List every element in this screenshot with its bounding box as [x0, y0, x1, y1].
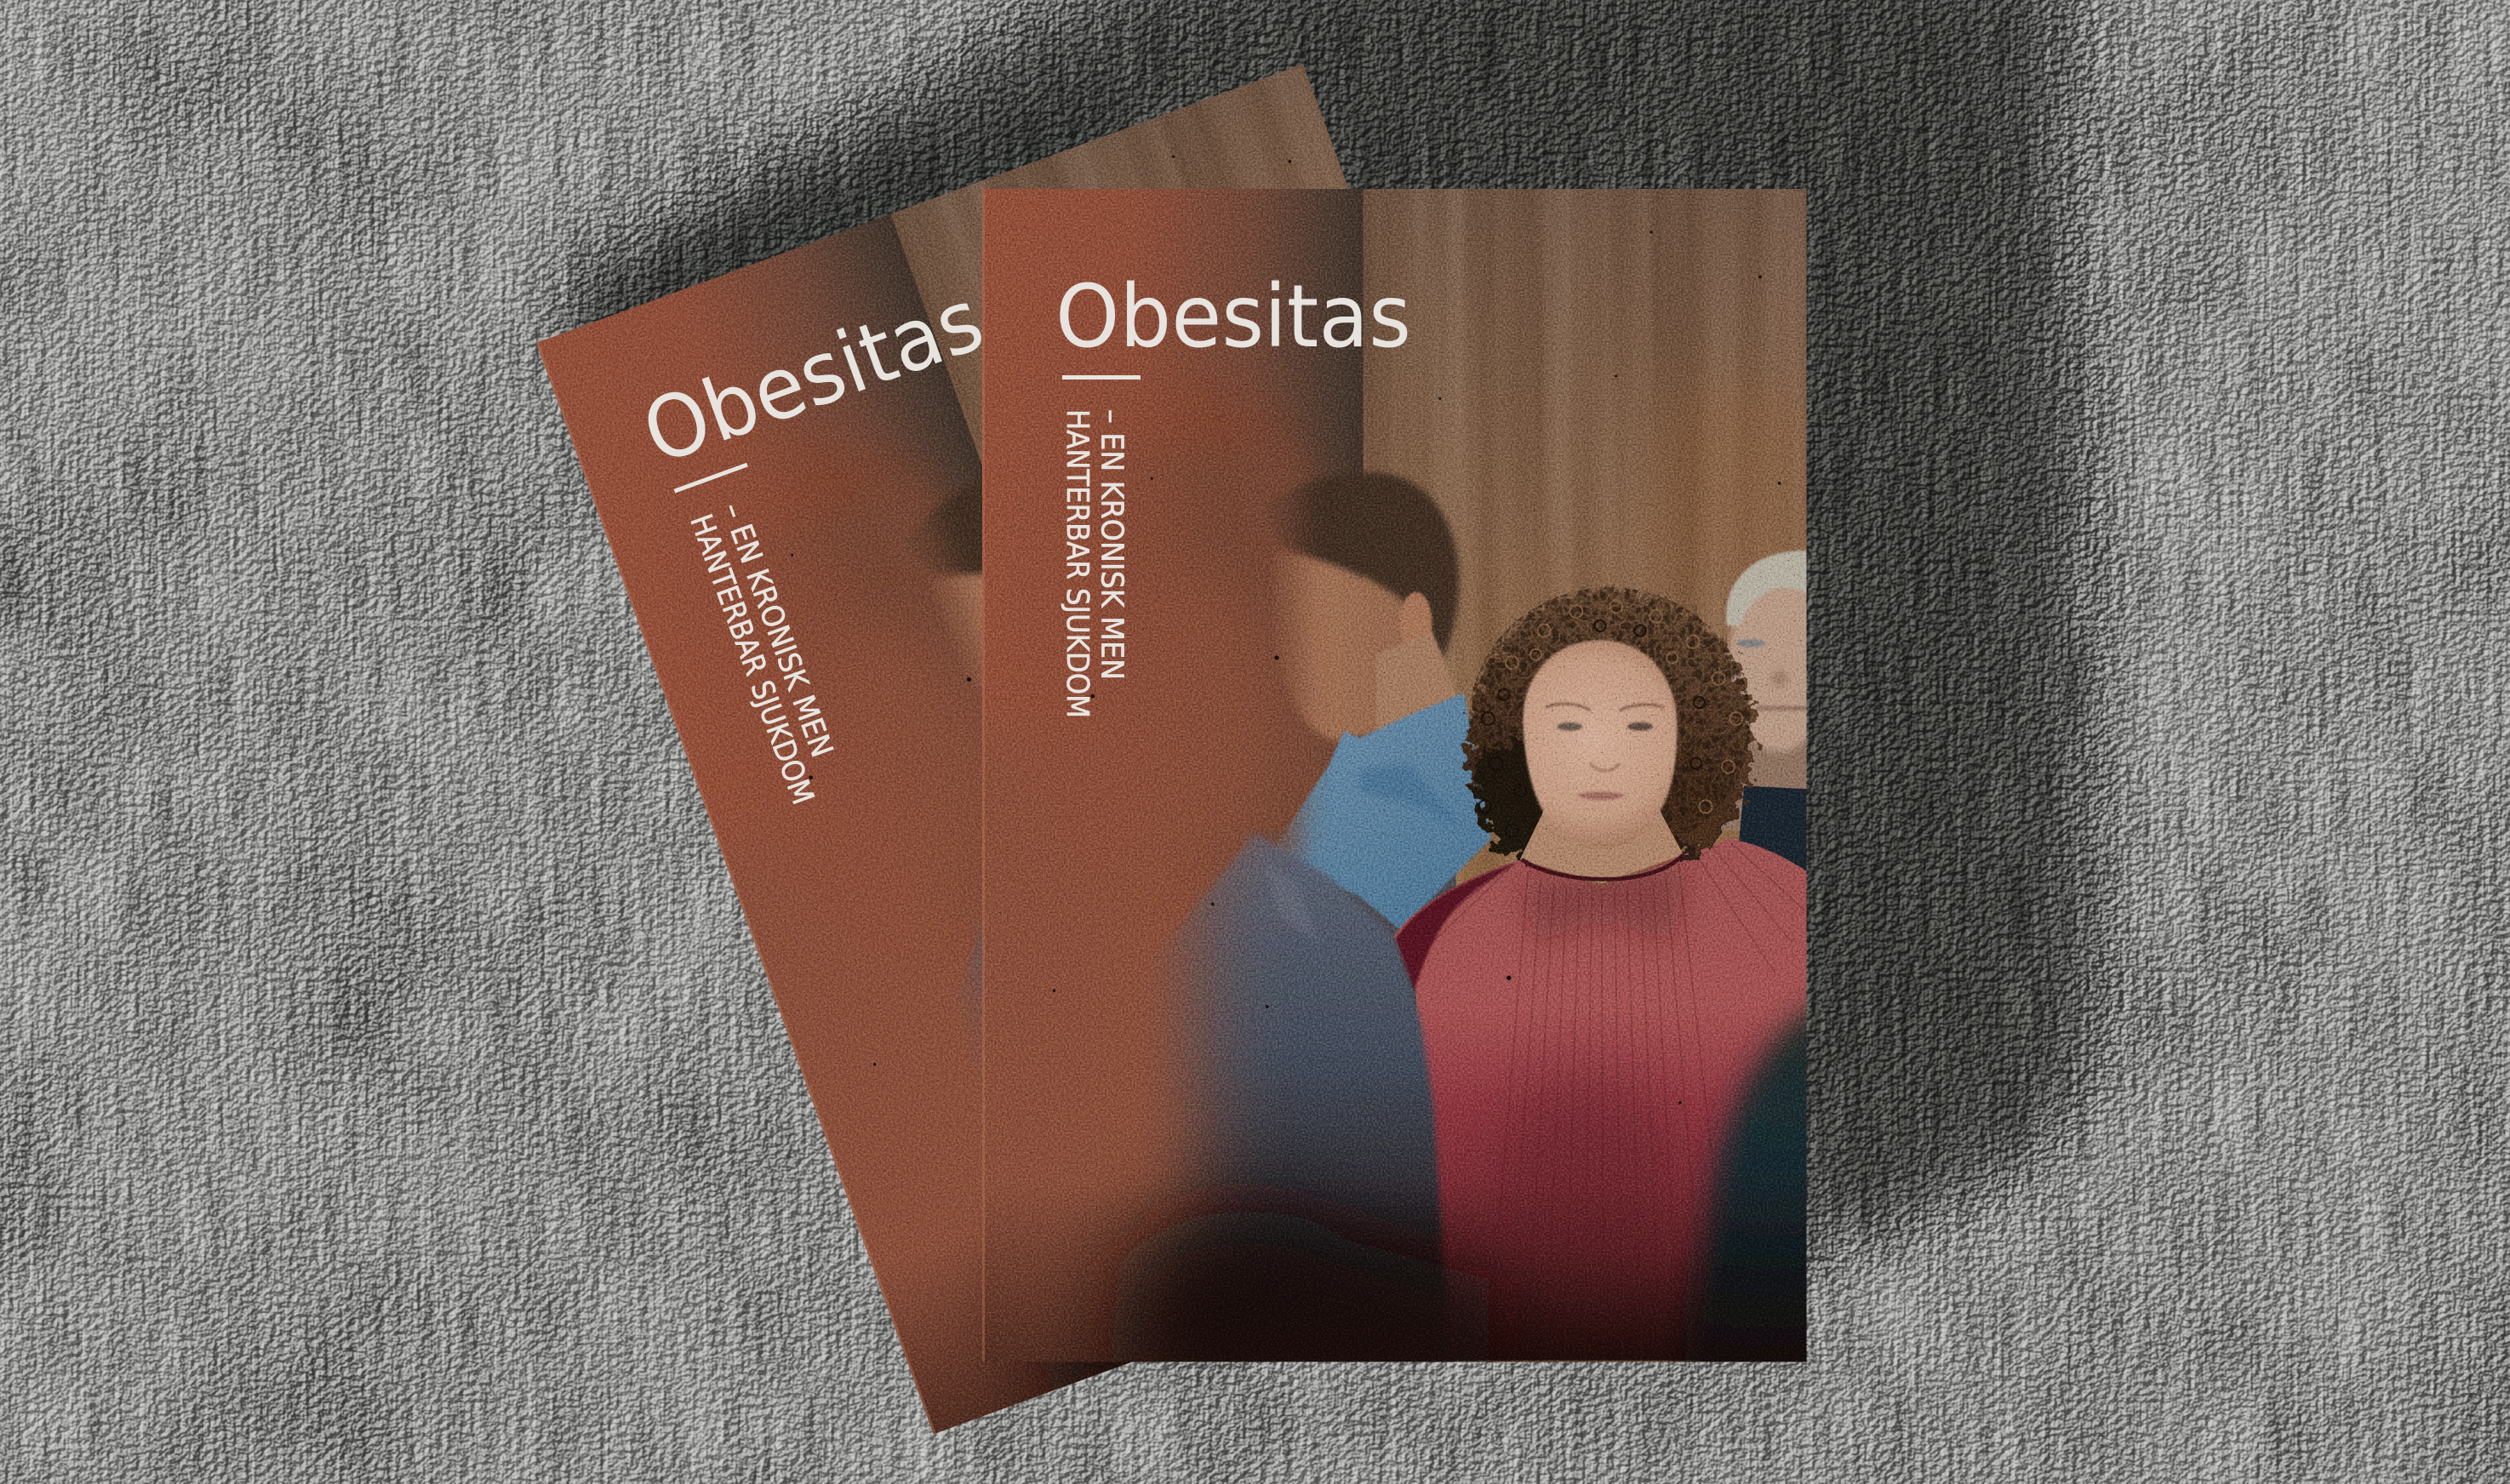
front brochure photo: people in front of a wooden wall: [895, 189, 1840, 1439]
back brochure subtitle: – EN KRONISK MEN: [715, 498, 839, 762]
front brochure subtitle: HANTERBAR SJUKDOM: [1060, 409, 1095, 718]
front brochure rule: [1062, 375, 1141, 380]
back brochure subtitle: HANTERBAR SJUKDOM: [683, 510, 820, 809]
front brochure title: Obesitas: [1055, 266, 1411, 368]
back brochure, rotated: [456, 53, 1758, 1484]
front brochure subtitle: [1060, 409, 1129, 718]
back brochure photo: [456, 53, 1758, 1484]
back brochure rule: [674, 463, 748, 494]
cast shadow of the brochures: [553, 0, 2097, 1251]
front brochure subtitle: – EN KRONISK MEN: [1095, 409, 1129, 680]
back brochure title: Obesitas: [630, 269, 996, 484]
front brochure: [895, 189, 1840, 1439]
